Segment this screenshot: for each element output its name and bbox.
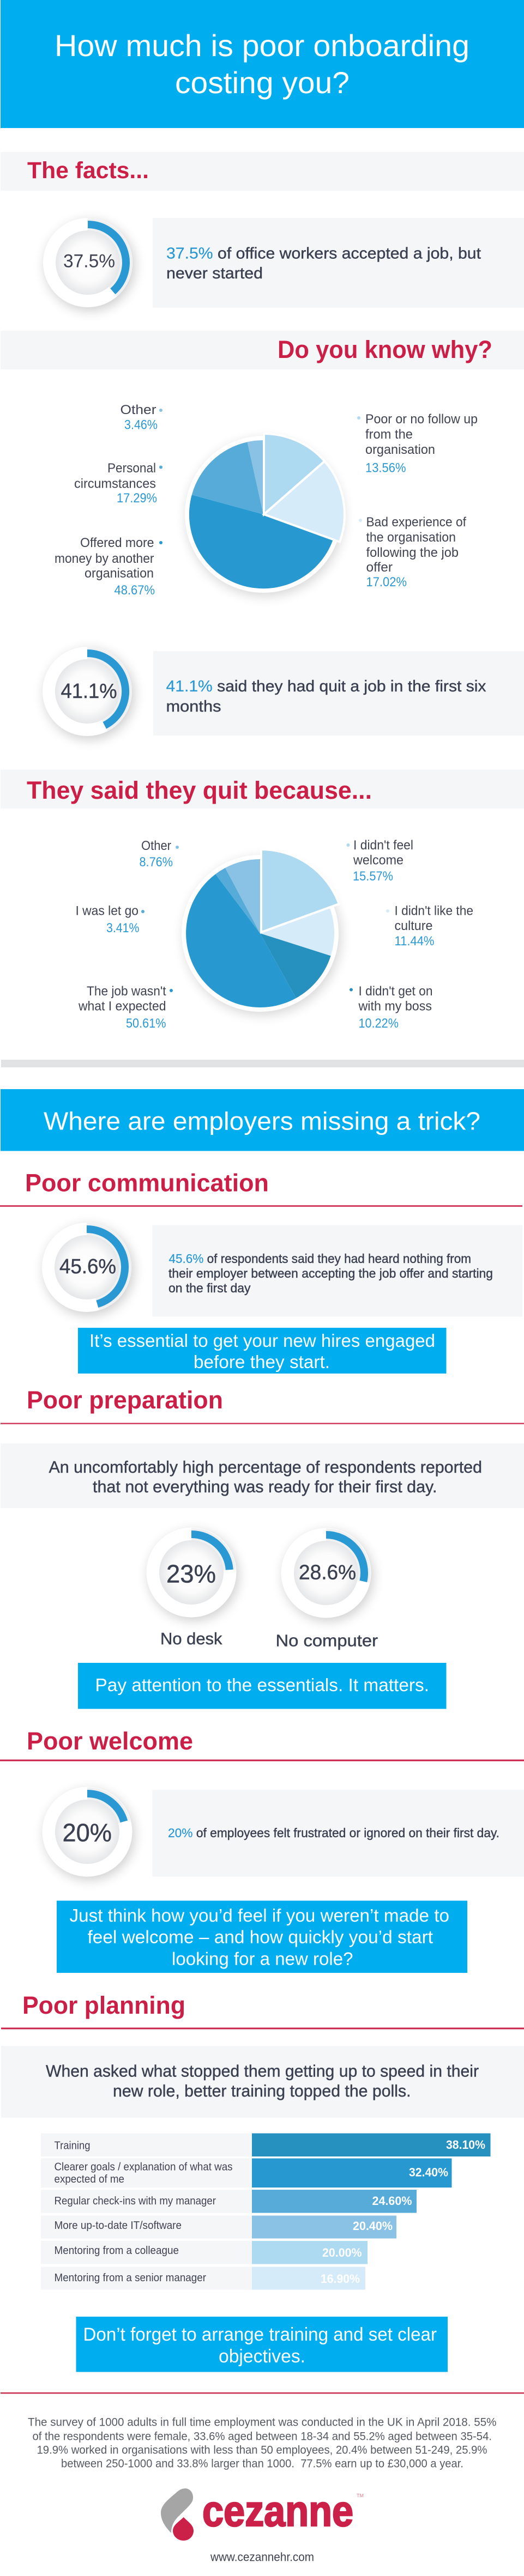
panel: office workers stat (153, 218, 524, 308)
label: I didn't get on with my boss 10.22%: 10.22% (359, 1016, 399, 1031)
callout: arrange training: Don’t forget to arrange training and set clear (83, 2324, 437, 2345)
bar: Training 38.10% (41, 2134, 491, 2156)
label: Personal circumstances 17.29%: Personal (107, 461, 156, 476)
label: The job wasn't what I expected 50.61%: what I expected (78, 999, 166, 1013)
label: I didn't like the culture 11.44%: I didn't like the (395, 903, 473, 919)
label: Bad experience 17.02%: offer (366, 560, 393, 575)
bar: Training 38.10%: Training (55, 2139, 91, 2152)
bar: More up-to-date IT 20.40% (41, 2215, 396, 2238)
label: The job wasn't what I expected 50.61%: The job wasn't (87, 984, 166, 999)
bar: Regular check-ins 24.60%: Regular check-ins with my manager (55, 2195, 216, 2207)
callout: just think (57, 1900, 467, 1973)
label: Poor or no follow up 13.56%: organisation (365, 442, 435, 457)
panel: heard nothing stat: 45.6% of respondents said they had heard nothing from (169, 1251, 471, 1266)
callout: engage new hires: before they start. (194, 1352, 330, 1372)
heading: Do you know why: Do you know why? (278, 336, 492, 363)
label: I didn't get on with my boss 10.22%: I didn't get on (359, 984, 433, 999)
title: How much is poor onboarding (55, 28, 469, 63)
label: Bad experience 17.02%: the organisation (366, 530, 456, 545)
donut: 23% no desk (146, 1528, 238, 1648)
survey methodology footnote: of the respondents were female, 33.6% aged between 18-34 and 55.2% aged between 35-54. (33, 2430, 492, 2443)
panel: heard nothing stat (153, 1225, 522, 1316)
label: I didn't like the culture 11.44%: 11.44% (395, 934, 434, 949)
donut: 37.5%: 37.5% (63, 251, 115, 271)
heading: They said they quit because (1, 769, 524, 809)
logo: Cezanne (161, 2487, 364, 2541)
panel: office workers stat: never started (166, 265, 263, 282)
trademark: TM (357, 2493, 364, 2499)
label: I didn't like the culture 11.44%: culture (395, 919, 433, 933)
bar: Clearer goals 32.40% (41, 2159, 451, 2188)
label: I was let go 3.41%: I was let go (75, 903, 138, 919)
heading: Poor planning (1, 1991, 524, 2029)
pie chart: reasons for quitting (182, 849, 341, 1015)
heading: Poor planning: Poor planning (22, 1991, 185, 2019)
section banner: Where are employers missing a trick: Where are employers missing a trick? (44, 1107, 480, 1135)
survey methodology footnote (28, 2416, 496, 2470)
bar: Regular check-ins 24.60%: 24.60% (372, 2194, 412, 2208)
donut: 41.1%: 41.1% (61, 680, 117, 703)
label: Other 3.46%: 3.46% (124, 417, 158, 433)
panel: quit stat (153, 651, 524, 736)
label: Offered more money 48.67%: organisation (85, 566, 154, 581)
bar: Mentoring from a colleague 20.00% (41, 2241, 368, 2264)
pie chart: why never started (185, 434, 345, 596)
panel: heard nothing stat: on the first day (168, 1281, 251, 1295)
callout: pay attention (78, 1663, 446, 1709)
panel: better training topped the polls: When asked what stopped them getting up to speed in their (46, 2062, 479, 2080)
survey methodology footnote: between 250-1000 and 33.8% larger than 1000. 77.5% earn up to £30,000 a year. (61, 2457, 463, 2470)
panel: better training topped the polls (1, 2046, 524, 2117)
bar: Clearer goals 32.40%: Clearer goals / explanation of what was (55, 2161, 232, 2173)
callout: just think: Just think how you’d feel if you weren’t made to (70, 1905, 449, 1925)
label: I didn't feel welcome 15.57% (347, 838, 413, 884)
label: Other 8.76%: Other (141, 839, 171, 853)
label: Other 3.46% (120, 403, 162, 433)
label: I was let go 3.41%: 3.41% (106, 921, 140, 935)
heading: Poor preparation: Poor preparation (27, 1386, 223, 1414)
panel: better training topped the polls: new role, better training topped the polls. (113, 2081, 411, 2100)
bar: Mentoring from a senior manager 16.90%: 16.90% (321, 2272, 360, 2286)
callout: engage new hires (78, 1328, 446, 1374)
label: Offered more money 48.67% (55, 536, 162, 598)
donut: 20% (43, 1787, 134, 1880)
bar chart: what stopped them (41, 2134, 491, 2289)
label: I was let go 3.41% (75, 903, 144, 935)
heading: The facts (1, 152, 524, 191)
donut: 28.6% no computer: 28.6% (299, 1562, 356, 1584)
label: Offered more money 48.67%: Offered more (80, 536, 154, 550)
bar: Training 38.10%: 38.10% (446, 2138, 485, 2152)
heading: Poor welcome: Poor welcome (27, 1727, 193, 1755)
panel: frustrated stat (153, 1790, 524, 1876)
heading: Poor communication (0, 1169, 522, 1207)
title: costing you? (175, 65, 350, 100)
bar: Regular check-ins 24.60% (41, 2190, 417, 2213)
label: The job wasn't what I expected 50.61% (78, 984, 173, 1031)
heading: Poor welcome (0, 1727, 524, 1761)
wordmark: cezanne (202, 2487, 353, 2535)
panel: office workers stat: 37.5% of office workers accepted a job, but (166, 245, 481, 263)
label: Personal circumstances 17.29%: circumstances (74, 476, 156, 491)
heading: The facts: The facts... (27, 157, 149, 184)
callout: pay attention: Pay attention to the essentials. It matters. (95, 1675, 429, 1695)
survey methodology footnote: 19.9% worked in organisations with less than 50 employees, 20.4% between 51-249, 25.9% (37, 2443, 487, 2456)
panel: not everything ready (1, 1444, 524, 1508)
panel: not everything ready: that not everything was ready for their first day. (93, 1478, 437, 1496)
label: The job wasn't what I expected 50.61%: 50.61% (126, 1016, 166, 1031)
label: Poor or no follow up 13.56% (357, 412, 478, 475)
callout: just think: looking for a new role? (172, 1948, 353, 1969)
header banner (1, 0, 524, 128)
label: Bad experience 17.02%: following the job (366, 545, 459, 560)
label: I didn't get on with my boss 10.22%: with my boss (358, 999, 432, 1013)
label: Offered more money 48.67%: money by another (55, 551, 154, 566)
panel: frustrated stat: 20% of employees felt frustrated or ignored on their first day. (168, 1826, 499, 1840)
website URL: www.cezannehr.com (210, 2550, 314, 2564)
label: Poor or no follow up 13.56%: Poor or no follow up (365, 412, 478, 427)
callout: arrange training (76, 2317, 448, 2372)
label: No computer: No computer (276, 1631, 378, 1650)
label: Personal circumstances 17.29%: 17.29% (117, 491, 157, 506)
bar: Clearer goals 32.40%: 32.40% (409, 2165, 448, 2179)
label: I didn't get on with my boss 10.22% (350, 984, 433, 1031)
label: Other 8.76% (140, 839, 179, 870)
donut: 45.6%: 45.6% (59, 1255, 116, 1278)
panel: heard nothing stat: their employer between accepting the job offer and starting (168, 1266, 493, 1280)
label: I didn't feel welcome 15.57%: 15.57% (353, 869, 393, 884)
donut: 37.5% (43, 218, 135, 311)
panel: quit stat: months (166, 698, 221, 715)
bar: Mentoring from a senior manager 16.90%: Mentoring from a senior manager (55, 2271, 206, 2284)
donut: 41.1% (43, 647, 134, 739)
label: Offered more money 48.67%: 48.67% (115, 583, 155, 598)
bar: Mentoring from a colleague 20.00%: 20.00% (322, 2246, 362, 2259)
bar: Mentoring from a colleague 20.00%: Mentoring from a colleague (55, 2244, 179, 2257)
panel: not everything ready: An uncomfortably high percentage of respondents reported (49, 1458, 482, 1477)
label: Poor or no follow up 13.56%: 13.56% (365, 461, 406, 475)
callout: arrange training: objectives. (219, 2346, 305, 2367)
donut: 23% no desk: 23% (166, 1559, 216, 1588)
heading: Poor communication: Poor communication (25, 1169, 269, 1196)
donut: 45.6% (42, 1223, 134, 1315)
section banner: Where are employers missing a trick (1, 1089, 524, 1151)
label: Other 3.46%: Other (120, 403, 156, 417)
label: Other 8.76%: 8.76% (140, 855, 173, 870)
label: No desk: No desk (160, 1629, 222, 1648)
label: Bad experience 17.02%: 17.02% (366, 575, 407, 590)
label: Bad experience 17.02%: Bad experience of (366, 515, 466, 530)
label: Bad experience 17.02% (359, 515, 466, 590)
survey methodology footnote: The survey of 1000 adults in full time employment was conducted in the UK in April 2018. 55% (28, 2416, 496, 2429)
label: Personal circumstances 17.29% (74, 461, 162, 506)
callout: just think: feel welcome – and how quickly you’d start (87, 1927, 433, 1947)
label: I didn't feel welcome 15.57%: I didn't feel (353, 838, 413, 853)
bar: More up-to-date IT 20.40%: 20.40% (353, 2219, 393, 2233)
donut: 28.6% no computer (276, 1528, 378, 1650)
label: I didn't feel welcome 15.57%: welcome (353, 853, 403, 867)
panel: quit stat: 41.1% said they had quit a job in the first six (166, 678, 486, 695)
bar: Mentoring from a senior manager 16.90% (41, 2267, 365, 2289)
title (55, 28, 469, 100)
heading: They said they quit because: They said they quit because... (27, 776, 372, 804)
label: I didn't like the culture 11.44% (386, 903, 473, 949)
icon: grey swoosh (161, 2488, 193, 2533)
donut: 20%: 20% (62, 1819, 112, 1847)
bar: Clearer goals 32.40%: expected of me (55, 2173, 124, 2185)
icon: red drop (173, 2517, 194, 2541)
bar: More up-to-date IT 20.40%: More up-to-date IT/software (55, 2219, 182, 2232)
label: Poor or no follow up 13.56%: from the (365, 427, 413, 442)
callout: engage new hires: It’s essential to get your new hires engaged (89, 1330, 435, 1351)
heading: Do you know why (1, 331, 524, 369)
